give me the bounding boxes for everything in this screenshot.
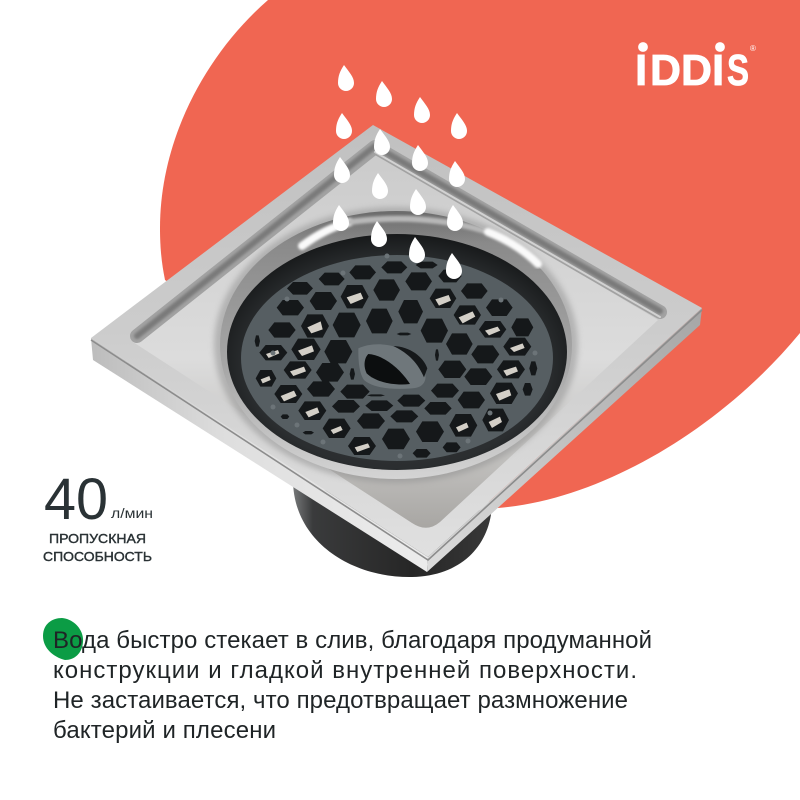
metal glints through holes bbox=[261, 293, 525, 452]
stat caption: СПОСОБНОСТЬ bbox=[43, 549, 152, 564]
logo: IDDIS bbox=[635, 42, 756, 95]
strainer centre hub bbox=[358, 344, 427, 389]
bowl highlights bbox=[302, 219, 538, 264]
background blob bbox=[160, 0, 800, 508]
water drops bbox=[333, 65, 467, 279]
body text: Вода быстро стекает в слив, благодаря продуманной bbox=[53, 627, 652, 654]
bowl funnel bbox=[220, 211, 572, 479]
plate inner floor bbox=[133, 152, 658, 528]
logo: IDDIS: ® bbox=[750, 44, 756, 53]
bowl bbox=[214, 207, 578, 483]
body text bbox=[53, 627, 652, 744]
strainer bbox=[241, 254, 553, 461]
strainer studs bbox=[270, 254, 538, 458]
body text: бактерий и плесени bbox=[53, 717, 276, 744]
stat caption: ПРОПУСКНАЯ bbox=[49, 531, 146, 546]
strainer holes bbox=[255, 261, 537, 458]
logo: IDDIS: D bbox=[681, 46, 712, 95]
stat unit: л/мин bbox=[111, 505, 153, 521]
bowl inner dark wall bbox=[227, 234, 567, 470]
stat number: 40 bbox=[44, 467, 108, 532]
logo: IDDIS: I bbox=[712, 46, 724, 95]
plate top surface bbox=[91, 125, 702, 557]
stat: 40 l/min capacity bbox=[43, 467, 153, 564]
perimeter groove bbox=[137, 146, 660, 336]
logo: IDDIS: D bbox=[650, 46, 681, 95]
plate side bands bbox=[91, 308, 702, 572]
stat caption bbox=[43, 531, 152, 564]
body text: конструкции и гладкой внутренней поверхности. bbox=[53, 657, 637, 684]
logo: IDDIS: I bbox=[635, 46, 647, 95]
logo: IDDIS: S bbox=[727, 46, 749, 95]
body text: Не застаивается, что предотвращает размножение bbox=[53, 687, 628, 714]
bowl shading on plate bbox=[214, 207, 578, 483]
drain pipe bbox=[293, 478, 492, 577]
product: floor drain bbox=[91, 125, 702, 577]
green accent blob bbox=[43, 618, 83, 660]
